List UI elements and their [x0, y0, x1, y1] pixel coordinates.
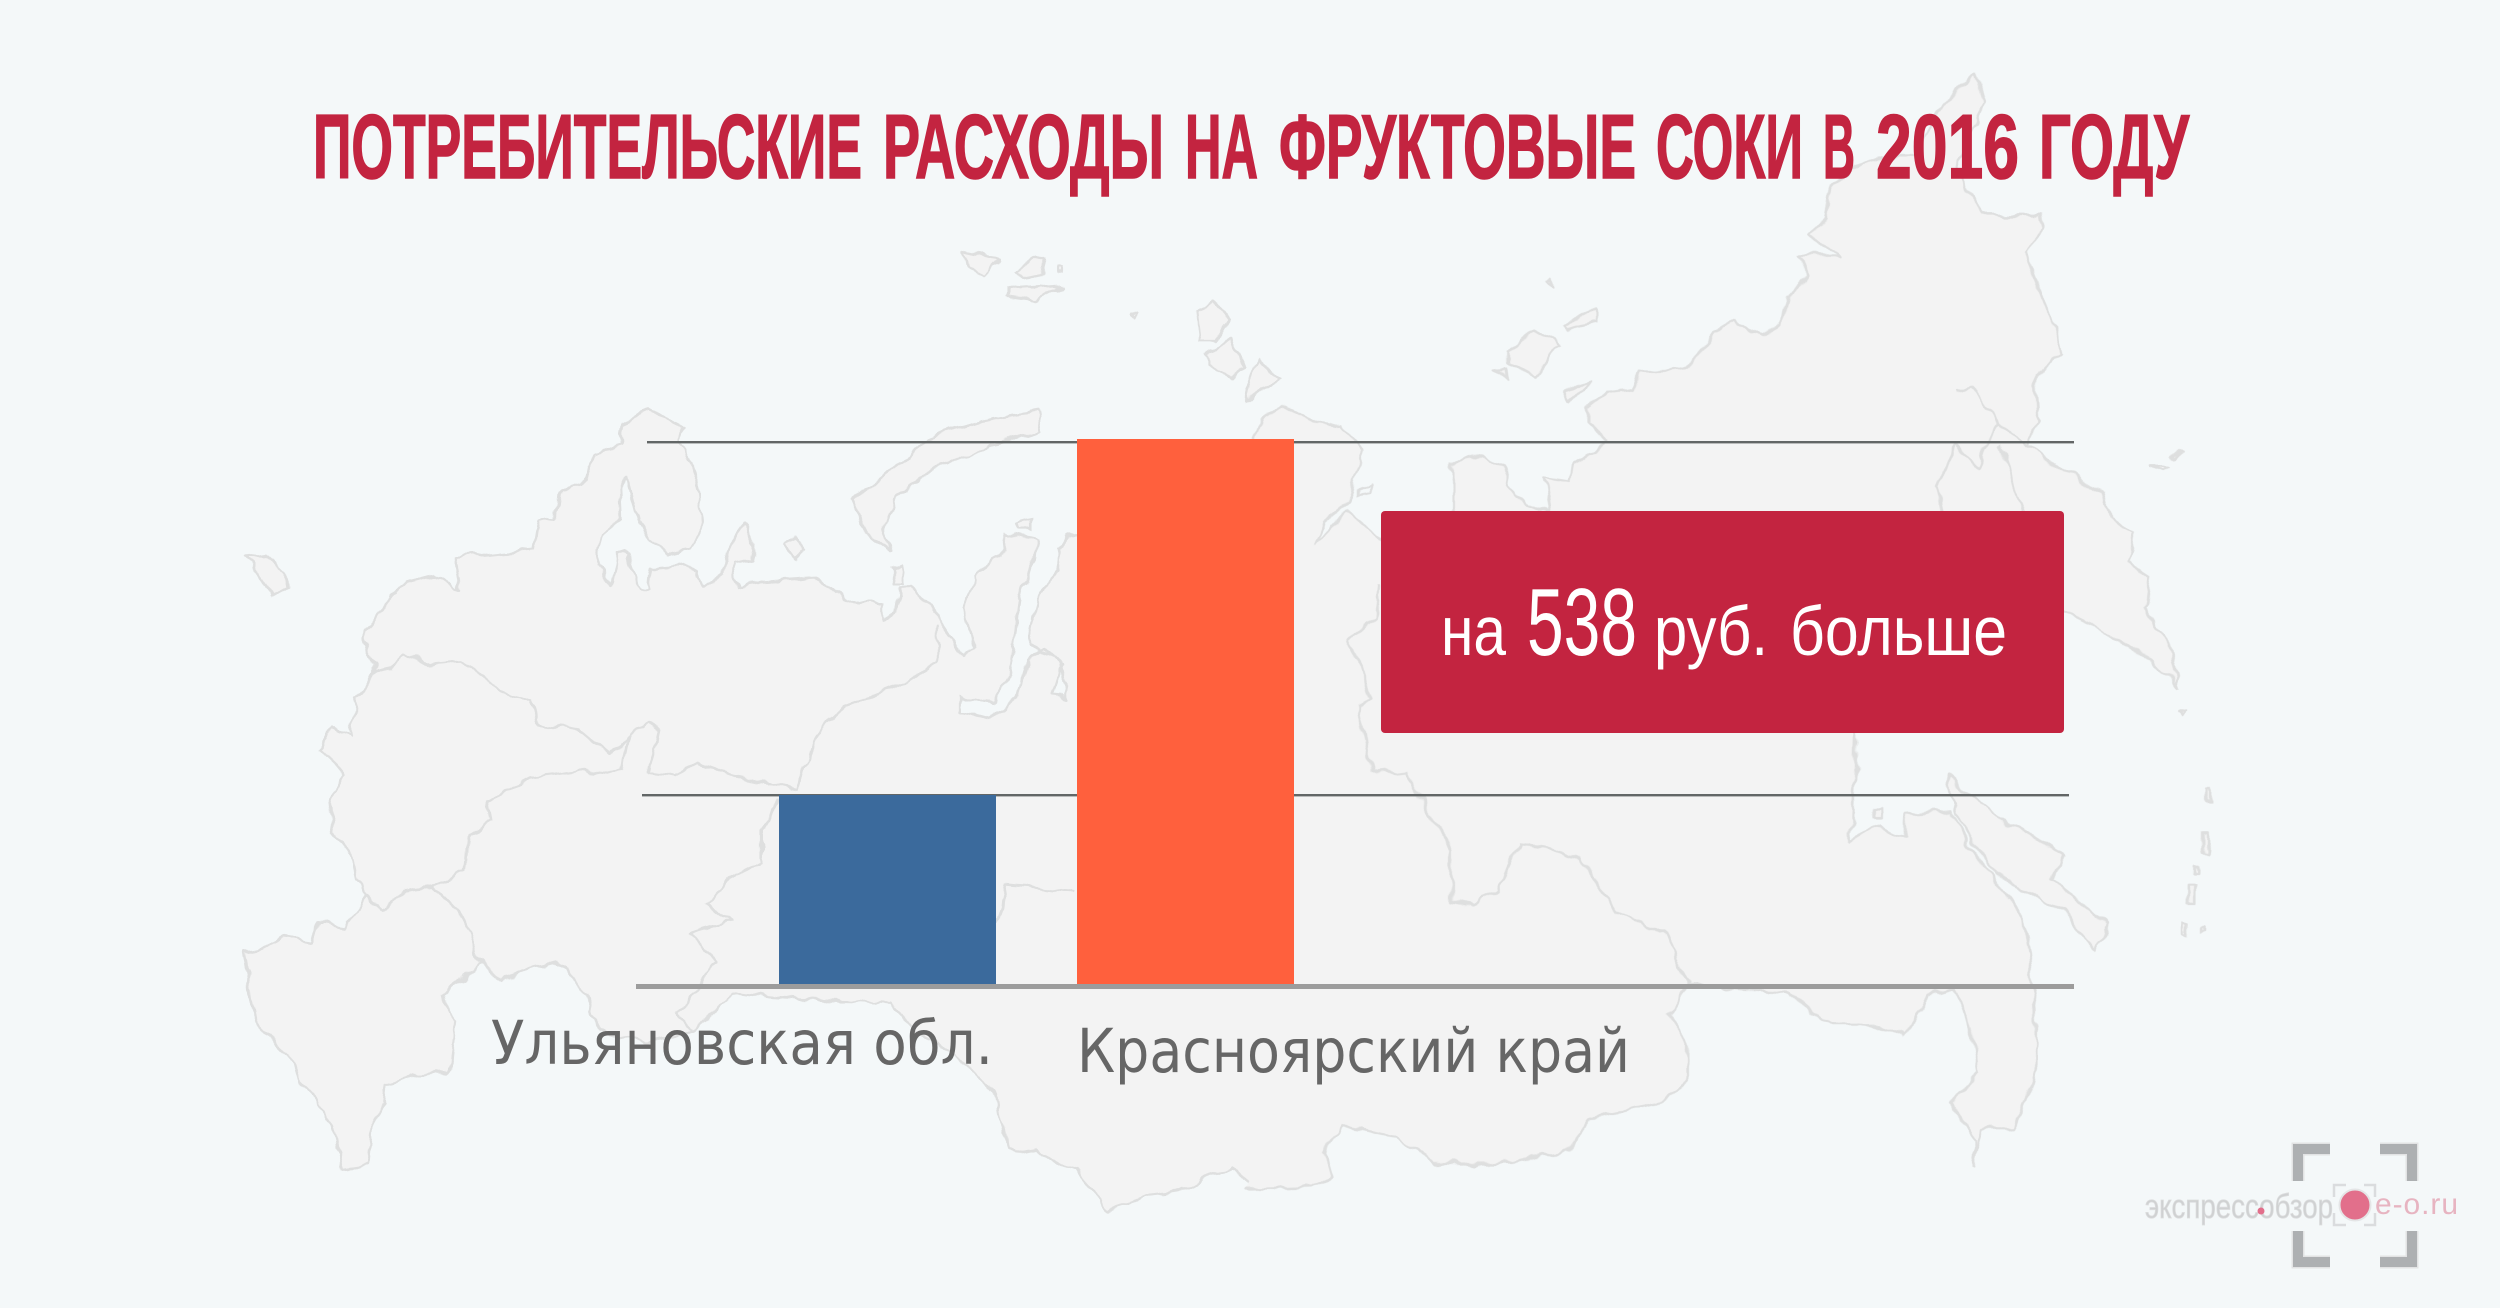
bar: Ульяновская обл. [779, 795, 996, 987]
logo: corner brackets [2298, 1149, 2412, 1262]
logo: domain: e-o.ru [2375, 1188, 2458, 1221]
title: ПОТРЕБИТЕЛЬСКИЕ [313, 97, 862, 198]
logo: express-obzor [2145, 1149, 2458, 1262]
map: western half [243, 251, 1280, 1210]
map: islands west [248, 251, 1280, 596]
logo: small dot [2258, 1208, 2264, 1214]
label: Красноярский край: Красноярский край [1077, 1016, 1630, 1087]
callout text: больше [1790, 592, 2007, 670]
label: Ульяновская обл.: Ульяновская обл. [491, 1008, 993, 1079]
map of Russia [243, 71, 2209, 1210]
logo: red circle [2340, 1190, 2370, 1220]
title: ГОДУ [2039, 97, 2190, 198]
title: РАСХОДЫ [883, 97, 1164, 198]
callout text: 538 [1527, 569, 1637, 676]
grid line: middle [642, 794, 2069, 796]
title: СОКИ [1656, 97, 1803, 198]
title: В [1823, 97, 1855, 198]
callout text: на [1441, 592, 1506, 670]
title: 2016 [1876, 97, 2019, 198]
axis baseline [636, 984, 2074, 989]
map: islands east [1497, 279, 2209, 951]
grid line: top [647, 441, 2074, 443]
logo: wordmark: экспрессобзор [2145, 1188, 2333, 1226]
bar: Красноярский край [1077, 439, 1294, 987]
logo: small brackets [2334, 1185, 2375, 1225]
callout text: руб. [1654, 592, 1768, 670]
title [313, 97, 2190, 198]
title: НА [1185, 97, 1258, 198]
map: internal borders west [368, 622, 1077, 1029]
callout text [1441, 569, 2007, 676]
bar chart [491, 439, 2074, 1087]
callout: difference [1381, 511, 2064, 733]
title: ФРУКТОВЫЕ [1279, 97, 1636, 198]
map: eastern half [1248, 71, 2209, 1190]
map: internal borders east [1347, 386, 2026, 985]
callout box [1381, 511, 2064, 733]
